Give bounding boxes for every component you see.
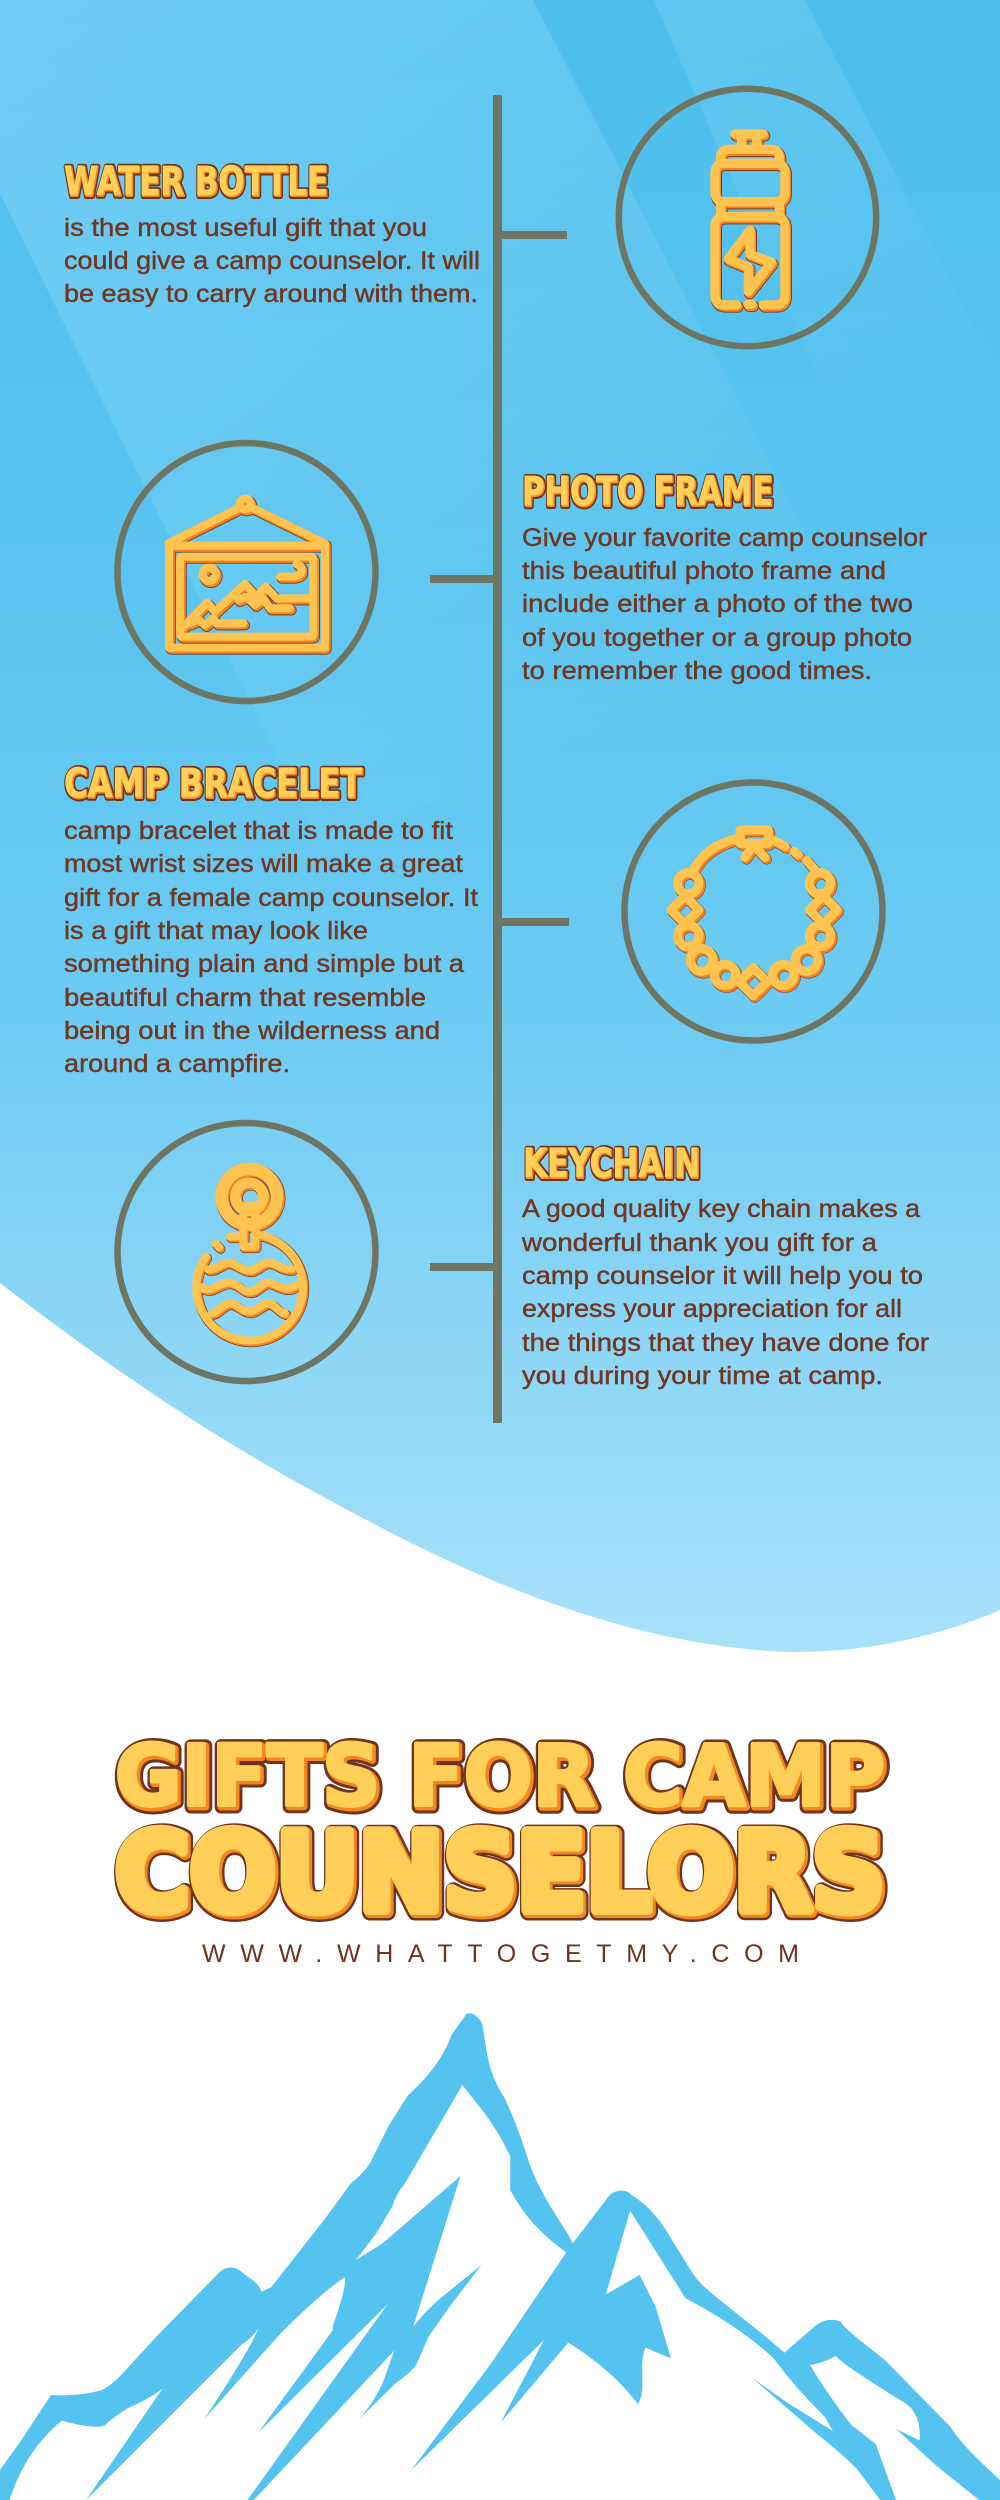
mountain illustration (0, 2013, 1000, 2500)
text: water bottle description: be easy to carry around with them. (64, 280, 478, 308)
text: photo frame description: to remember the good times. (522, 657, 872, 685)
timeline spine and connectors (430, 95, 569, 1423)
text: water bottle description: could give a camp counselor. It will (64, 247, 480, 275)
text: keychain description: you during your time at camp. (522, 1362, 883, 1390)
panel: camp bracelet (64, 761, 882, 1078)
icon: keychain in ring (118, 1123, 376, 1381)
text: photo frame description: this beautiful photo frame and (522, 557, 886, 585)
sky background panel (0, 0, 1000, 1652)
panel: water bottle (64, 89, 876, 346)
text: water bottle description: is the most useful gift that you (64, 214, 427, 242)
text: photo frame description (522, 524, 927, 685)
title: COUNSELORS (117, 1813, 887, 1938)
text: camp bracelet description: beautiful charm that resemble (64, 984, 426, 1012)
heading: water bottle: WATER BOTTLE (64, 159, 328, 205)
title: COUNSELORS (117, 1813, 887, 1938)
heading: camp bracelet: CAMP BRACELET (65, 762, 364, 808)
heading: water bottle: WATER BOTTLE (65, 160, 329, 206)
text: camp bracelet description: around a campfire. (64, 1050, 290, 1078)
heading: keychain: KEYCHAIN (523, 1141, 700, 1187)
text: keychain description: the things that they have done for (522, 1329, 929, 1357)
title: COUNSELORS (115, 1811, 885, 1936)
text: camp bracelet description: camp bracelet that is made to fit (64, 817, 453, 845)
text: camp bracelet description (64, 817, 478, 1078)
text: camp bracelet description: gift for a female camp counselor. It (64, 884, 478, 912)
icon: photo frame in ring (118, 443, 376, 701)
icon: bracelet in ring (624, 782, 882, 1040)
text: keychain description: A good quality key chain makes a (522, 1195, 920, 1223)
text: camp bracelet description: is a gift that may look like (64, 917, 368, 945)
text: keychain description: camp counselor it will help you to (522, 1262, 923, 1290)
icon: water bottle in ring (619, 89, 876, 346)
panel: photo frame (118, 443, 927, 701)
text: photo frame description: include either a photo of the two (522, 590, 913, 618)
heading: keychain: KEYCHAIN (524, 1142, 701, 1188)
heading: keychain: KEYCHAIN (524, 1142, 701, 1188)
text: keychain description: wonderful thank you gift for a (521, 1229, 877, 1257)
heading: photo frame: PHOTO FRAME (522, 469, 773, 515)
text: camp bracelet description: something plain and simple but a (64, 950, 464, 978)
text: photo frame description: Give your favorite camp counselor (522, 524, 927, 552)
heading: photo frame: PHOTO FRAME (523, 470, 774, 516)
panel: keychain (118, 1123, 929, 1390)
title: GIFTS FOR CAMP (117, 1729, 887, 1827)
title: GIFTS FOR CAMP (115, 1727, 885, 1825)
text: camp bracelet description: being out in the wilderness and (64, 1017, 440, 1045)
title: GIFTS FOR CAMP (117, 1729, 887, 1827)
heading: water bottle: WATER BOTTLE (65, 160, 329, 206)
heading: photo frame: PHOTO FRAME (523, 470, 774, 516)
title (115, 1727, 887, 1938)
text: camp bracelet description: most wrist sizes will make a great (64, 850, 463, 878)
text: keychain description (521, 1195, 929, 1390)
heading: camp bracelet: CAMP BRACELET (65, 762, 364, 808)
heading: camp bracelet: CAMP BRACELET (64, 761, 363, 807)
website url: WWW.WHATTOGETMY.COM (202, 1940, 799, 1968)
text: photo frame description: of you together or a group photo (522, 624, 912, 652)
text: water bottle description (64, 214, 480, 308)
text: keychain description: express your appreciation for all (522, 1295, 902, 1323)
